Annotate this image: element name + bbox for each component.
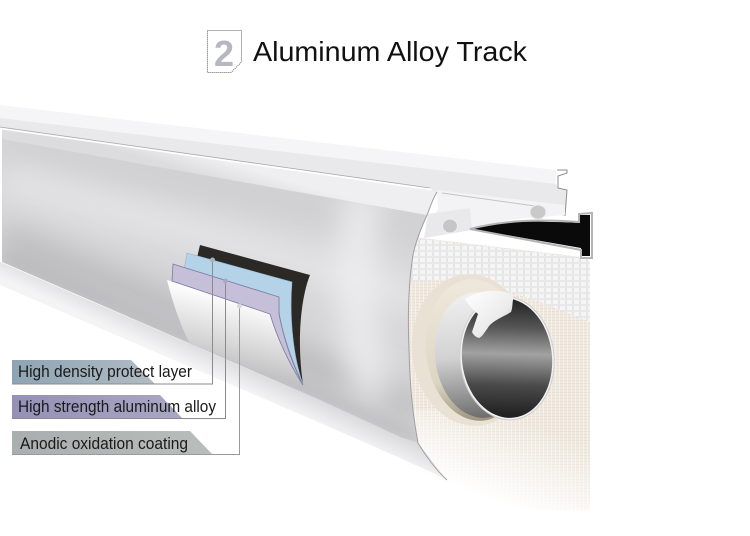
heading bbox=[208, 30, 528, 74]
label: protect layer: High density protect layer bbox=[18, 362, 192, 381]
hanger edge bbox=[442, 193, 535, 206]
rail end profile bbox=[557, 170, 567, 216]
label: protect layer bbox=[12, 258, 215, 384]
fabric wrap outer bbox=[404, 268, 540, 432]
label: aluminum alloy: High strength aluminum alloy bbox=[18, 397, 216, 416]
badge: number 2: 2 bbox=[214, 33, 234, 74]
black protect backing bbox=[196, 245, 310, 384]
rail front face bbox=[0, 118, 567, 216]
mesh top of fabric bbox=[405, 237, 590, 322]
label: aluminum alloy bbox=[12, 278, 228, 419]
blue layer bbox=[184, 253, 303, 384]
tube side bbox=[429, 288, 531, 422]
panel tip edge bbox=[408, 192, 447, 480]
badge: number 2 bbox=[208, 30, 242, 74]
top rail bbox=[0, 105, 567, 238]
cut white coating bbox=[167, 280, 303, 387]
black channel bbox=[470, 213, 592, 258]
front panel bbox=[2, 139, 426, 443]
roller tube bbox=[404, 268, 560, 432]
lower lip bbox=[0, 262, 447, 480]
roller pin left bbox=[442, 219, 458, 233]
title: Aluminum Alloy Track bbox=[253, 36, 528, 67]
clip groove bbox=[465, 291, 514, 338]
label: oxidation coating: Anodic oxidation coating bbox=[20, 434, 188, 453]
layer cutaway bbox=[167, 245, 310, 387]
inner hanger bbox=[425, 190, 565, 238]
purple layer bbox=[172, 264, 303, 385]
fabric shade bbox=[400, 236, 595, 515]
tube end rim bbox=[454, 291, 560, 425]
label bars bbox=[12, 258, 242, 455]
fabric wrap on roller bbox=[419, 274, 533, 426]
tube end face bbox=[456, 294, 558, 422]
valance body bbox=[0, 120, 450, 480]
valance top lip bbox=[2, 129, 437, 215]
rail top surface bbox=[0, 105, 556, 184]
roller pin right bbox=[530, 205, 546, 219]
label: oxidation coating bbox=[12, 304, 242, 455]
